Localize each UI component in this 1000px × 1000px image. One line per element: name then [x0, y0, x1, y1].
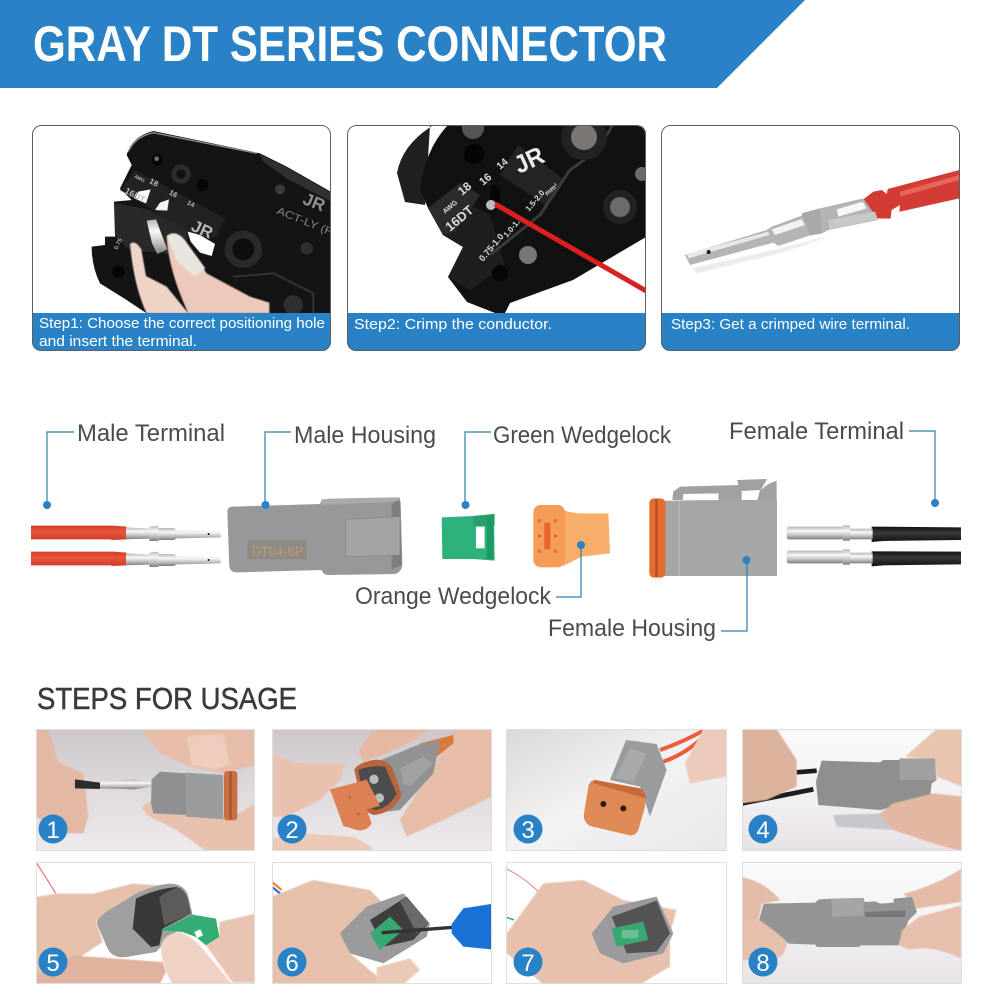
panel: step 2 crimp the conductor: 16 — [477, 171, 494, 188]
photo step 4: male housing held — [742, 729, 962, 851]
heading: steps for usage: STEPS FOR USAGE — [37, 681, 297, 716]
exploded connector diagram — [31, 418, 961, 642]
female terminals — [787, 525, 961, 566]
panel: step 2 crimp the conductor: AWG — [442, 199, 460, 216]
badge 8: 8 — [756, 950, 770, 977]
photo step 1: insert terminal into housing — [36, 729, 255, 851]
label: male housing — [262, 422, 436, 509]
badge 3: 3 — [521, 817, 535, 844]
badge 6 — [278, 948, 306, 977]
step 2 caption band: Step2: Crimp the conductor. — [354, 316, 552, 333]
label: male terminal: Male Terminal — [77, 420, 225, 447]
label: orange wedgelock: Orange Wedgelock — [355, 583, 552, 610]
green wedgelock — [442, 514, 495, 561]
title banner: GRAY DT SERIES CONNECTOR — [33, 16, 667, 72]
badge 1: 1 — [46, 817, 60, 844]
male terminals — [31, 526, 221, 567]
label: green wedgelock — [462, 422, 672, 509]
orange wedgelock — [533, 505, 610, 567]
panel: step 2 crimp the conductor: JR — [510, 141, 549, 179]
label: female housing — [548, 556, 750, 642]
panel: step 1 choose positioning hole: 0.75 — [114, 237, 124, 251]
badge 7: 7 — [521, 950, 535, 977]
panel: step 2 crimp the conductor — [347, 114, 649, 351]
label: orange wedgelock — [355, 541, 585, 610]
step 1 caption band: and insert the terminal. — [39, 333, 197, 350]
step 3 caption band: Step3: Get a crimped wire terminal. — [671, 316, 910, 333]
step 3 caption band — [661, 313, 960, 351]
male housing: DT04-6P — [252, 543, 303, 559]
panel: step 1 choose positioning hole: AWG — [134, 174, 146, 184]
photo step 2: insert orange wedgelock — [272, 729, 492, 851]
panel: step 1 choose positioning hole: 16 — [168, 188, 179, 200]
panel: step 1 choose positioning hole: 18 — [148, 176, 160, 189]
step 2 caption band — [347, 313, 646, 351]
label: female terminal — [729, 418, 939, 507]
panel: step 2 crimp the conductor: 1.5-2.0 — [524, 188, 547, 213]
badge 1 — [38, 814, 68, 844]
badge 4 — [748, 814, 778, 844]
badge 8 — [748, 948, 778, 977]
label: female housing: Female Housing — [548, 615, 716, 642]
panel: step 2 crimp the conductor: mm² — [544, 182, 560, 198]
title banner — [0, 0, 805, 88]
panel: step 1 choose positioning hole: ACT-LY (F) — [275, 205, 338, 240]
photo step 8: mated connector — [742, 862, 962, 985]
badge 3 — [514, 814, 542, 844]
badge 2 — [278, 814, 306, 844]
label: male housing: Male Housing — [294, 422, 436, 449]
male housing — [227, 497, 402, 575]
photo step 3: assembled orange face — [506, 729, 727, 851]
panel: step 2 crimp the conductor: 16DT — [442, 202, 476, 234]
panel: step 1 choose positioning hole — [32, 125, 338, 351]
photo step 7: wedgelock seated — [506, 862, 727, 984]
panel: step 2 crimp the conductor: 0.75-1.0 — [477, 232, 506, 263]
photo step 5: insert green wedgelock — [36, 862, 256, 985]
panel: step 2 crimp the conductor: 14 — [495, 156, 511, 172]
photo step 6: push wedgelock with screwdriver — [272, 862, 492, 984]
panel: step 1 choose positioning hole: 16DT — [123, 186, 148, 205]
panel: step 2 crimp the conductor: 1.0-1.5 — [502, 214, 525, 239]
step 1 caption band: Step1: Choose the correct positioning hole — [39, 315, 325, 332]
panel: step 1 choose positioning hole: JR — [300, 188, 329, 216]
panel: step 1 choose positioning hole: JR — [188, 216, 216, 242]
panel: step 1 choose positioning hole: 14 — [186, 200, 196, 209]
step 1 caption band — [32, 313, 331, 351]
badge 2: 2 — [285, 817, 299, 844]
panel: step 3 crimped wire terminal — [661, 125, 960, 351]
badge 4: 4 — [756, 817, 770, 844]
badge 5: 5 — [46, 950, 60, 977]
badge 5 — [38, 948, 68, 977]
label: green wedgelock: Green Wedgelock — [493, 422, 672, 449]
label: male terminal — [43, 420, 225, 509]
badge 7 — [514, 948, 542, 977]
label: female terminal: Female Terminal — [729, 418, 904, 445]
female housing — [649, 479, 777, 578]
badge 6: 6 — [285, 950, 299, 977]
panel: step 2 crimp the conductor: 18 — [455, 179, 474, 198]
